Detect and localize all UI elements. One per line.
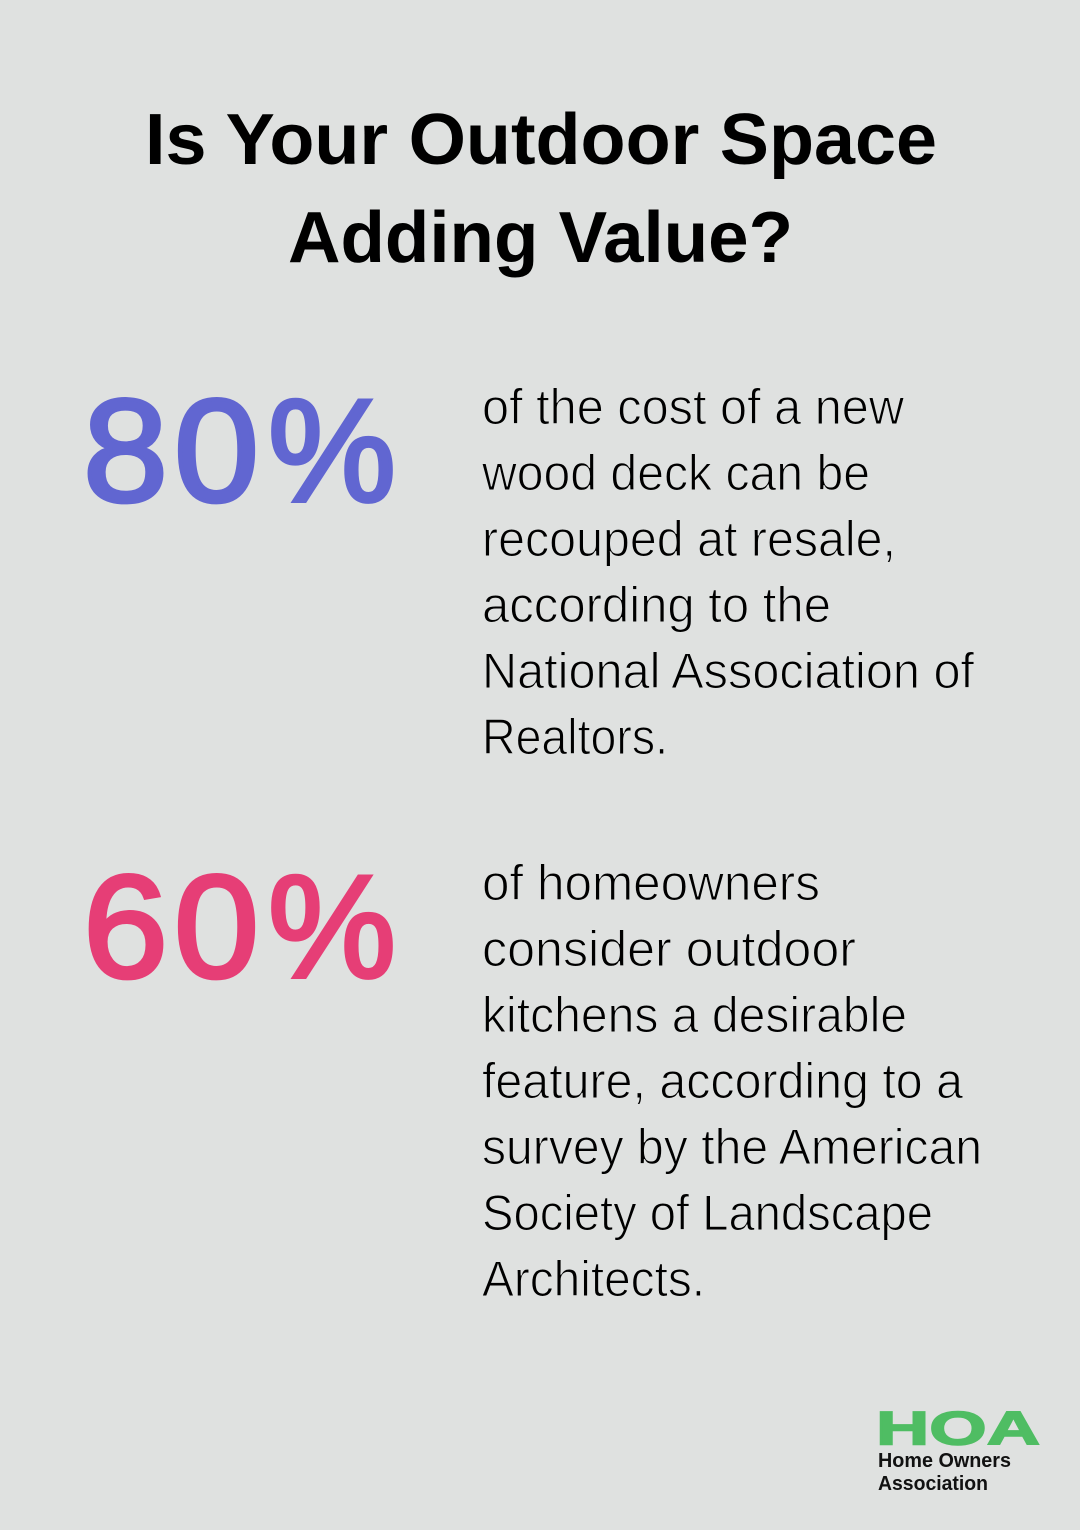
text block: 80% description: National Association of <box>482 643 974 699</box>
stat: 80%: 0 <box>174 369 259 532</box>
text block: 80% description: of the cost of a new <box>482 379 905 435</box>
stat: 80% <box>83 369 396 532</box>
stat: 60%: 6 <box>83 845 168 1008</box>
stat: 60%: % <box>268 845 396 1008</box>
text block: 60% description: feature, according to a <box>482 1053 963 1109</box>
stat: 60% <box>83 845 396 1008</box>
logo text: Home Owners <box>878 1450 1011 1472</box>
text block: 60% description: consider outdoor <box>482 921 856 977</box>
stat: 80%: 8 <box>83 369 168 532</box>
text block: 80% description: wood deck can be <box>481 445 870 501</box>
text block: 60% description <box>482 855 982 1307</box>
logo text: Association <box>878 1473 988 1495</box>
title: Adding Value? <box>288 198 793 278</box>
text block: 60% description: of homeowners <box>482 855 820 911</box>
title <box>145 100 937 278</box>
stat: 60%: 0 <box>174 845 259 1008</box>
text block: 60% description: survey by the American <box>482 1119 982 1175</box>
text block: 80% description: recouped at resale, <box>482 511 896 567</box>
text block: 60% description: kitchens a desirable <box>482 987 907 1043</box>
text block: 80% description <box>481 379 974 765</box>
title: Is Your Outdoor Space <box>145 100 937 180</box>
logo: HOA Home Owners Association <box>876 1402 1040 1495</box>
text block: 60% description: Architects. <box>482 1251 705 1307</box>
logo mark: HOA letters: HOA <box>876 1402 1040 1454</box>
stat: 80%: % <box>268 369 396 532</box>
logo text <box>878 1450 1011 1495</box>
text block: 60% description: Society of Landscape <box>482 1185 933 1241</box>
text block: 80% description: Realtors. <box>482 709 668 765</box>
text block: 80% description: according to the <box>482 577 831 633</box>
